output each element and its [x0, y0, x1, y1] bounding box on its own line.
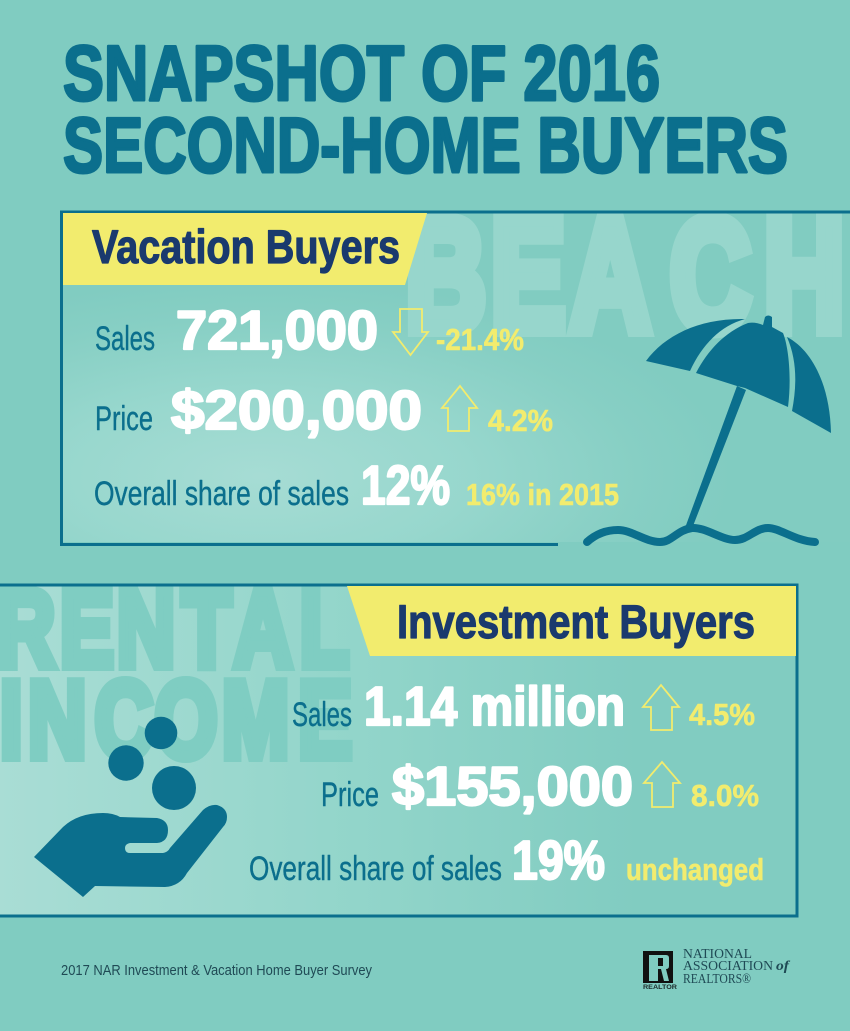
row: price: Price [321, 776, 379, 814]
row: sales: -21.4% [436, 322, 524, 357]
row: sales: Sales [95, 320, 155, 358]
panel border [62, 212, 850, 544]
row: share: 19% [512, 829, 605, 891]
row: price: Price [95, 400, 153, 438]
icon: hand with coins [34, 717, 227, 897]
watermark: rental income: INCOME [0, 659, 352, 781]
row: price: $200,000 [171, 379, 422, 441]
logo: national association of realtors: of [776, 958, 791, 973]
row: sales [292, 675, 755, 737]
title: SNAPSHOT OF 2016 [63, 29, 660, 117]
row: price: $155,000 [392, 755, 633, 817]
logo: national association of realtors: NATIONAL [683, 946, 752, 961]
row: price [95, 379, 553, 441]
panel: vacation buyers [62, 186, 850, 544]
logo: national association of realtors: ASSOCIATION [683, 958, 773, 973]
heading band: Investment Buyers [397, 595, 755, 648]
row: price [321, 755, 759, 817]
row: price: 8.0% [691, 778, 759, 813]
heading band [347, 586, 796, 656]
title [63, 29, 788, 189]
source note: 2017 NAR Investment & Vacation Home Buyer Survey [61, 963, 373, 979]
row: share: Overall share of sales [249, 850, 502, 888]
logo: national association of realtors: REALTOR [643, 985, 678, 991]
icon: beach umbrella [587, 316, 831, 542]
heading band [63, 213, 427, 285]
row: sales [95, 299, 524, 361]
row: share: 12% [361, 454, 450, 516]
logo: national association of realtors: REALTORS® [683, 971, 751, 986]
watermark: rental income: RENTAL [0, 568, 349, 690]
watermark: beach: BEACH [405, 186, 845, 365]
row: share: Overall share of sales [94, 475, 349, 513]
logo: national association of realtors [643, 946, 791, 991]
panel: investment buyers [0, 568, 797, 916]
row: sales: 721,000 [176, 299, 378, 361]
row: share: unchanged [626, 852, 764, 887]
row: share [249, 829, 764, 891]
row: share: 16% in 2015 [466, 477, 619, 512]
row: sales: 1.14 million [364, 675, 625, 737]
row: price: 4.2% [488, 403, 553, 438]
row: share [94, 454, 619, 516]
heading band: Vacation Buyers [92, 220, 400, 273]
row: sales: 4.5% [689, 697, 755, 732]
panel border [0, 585, 797, 916]
row: sales: Sales [292, 696, 352, 734]
watermark: rental income [0, 586, 352, 763]
